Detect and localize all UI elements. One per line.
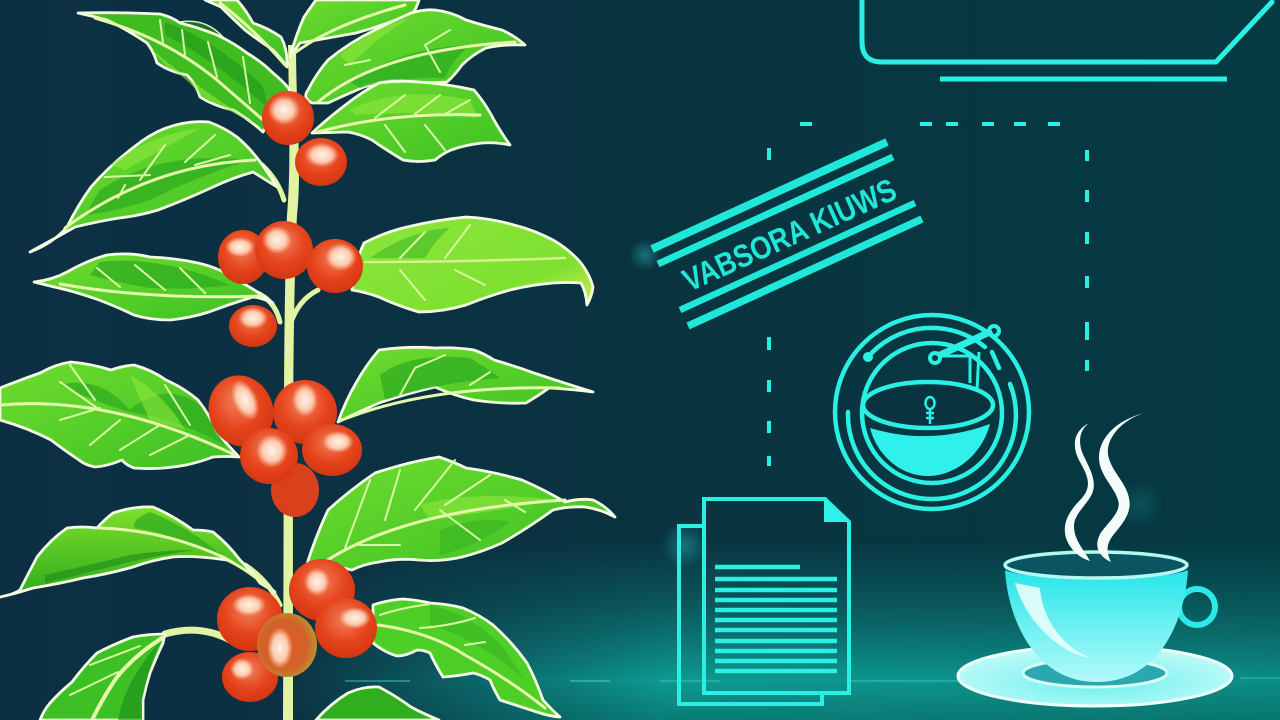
cup rim <box>1005 552 1187 578</box>
document text lines <box>715 567 837 671</box>
horizon light line <box>345 678 1280 681</box>
small figure in bowl <box>926 397 934 424</box>
leaf: top left <box>78 13 290 132</box>
leaf: right of top berry <box>312 81 510 162</box>
icon: documents <box>679 499 849 704</box>
berries: bottom cluster <box>217 559 377 702</box>
leaf: left lower <box>0 507 275 597</box>
glow spots <box>629 239 1164 569</box>
spoon <box>930 326 999 390</box>
dashed connector lines <box>769 124 1087 466</box>
bowl <box>863 382 993 428</box>
icon: bowl in circular badge <box>835 315 1029 509</box>
leaf: right lower <box>373 599 560 717</box>
stamp label <box>652 142 922 326</box>
bottom teal glow <box>312 555 1280 720</box>
stamp label: VABSORA KIUWS <box>677 171 902 298</box>
berries: top <box>262 91 347 186</box>
top monitor frame <box>862 0 1272 79</box>
leaf: right large yellow tip <box>352 217 593 312</box>
leaf: left big <box>0 362 239 469</box>
handle <box>1179 589 1215 625</box>
cup highlight <box>1015 583 1092 658</box>
stem <box>283 45 299 720</box>
leaf: top middle <box>205 0 287 67</box>
leaf: top center right <box>290 0 419 57</box>
leaf: left upper <box>30 122 277 252</box>
leaf: bottom left <box>40 634 165 720</box>
leaf: right big <box>306 457 615 570</box>
saucer <box>958 646 1232 706</box>
icon: coffee cup <box>958 413 1232 706</box>
coffee plant <box>0 0 615 720</box>
leaf: left second <box>34 254 273 320</box>
steam <box>1065 413 1144 562</box>
berries: upper cluster <box>218 221 363 347</box>
branch stems <box>165 165 318 640</box>
leaf: bottom center <box>316 687 439 720</box>
leaf: upper right <box>306 10 525 103</box>
leaf: small back leaf <box>180 21 222 36</box>
berries: middle cluster <box>199 366 362 517</box>
cup body <box>1005 570 1188 682</box>
leaf: right slender <box>338 347 593 422</box>
